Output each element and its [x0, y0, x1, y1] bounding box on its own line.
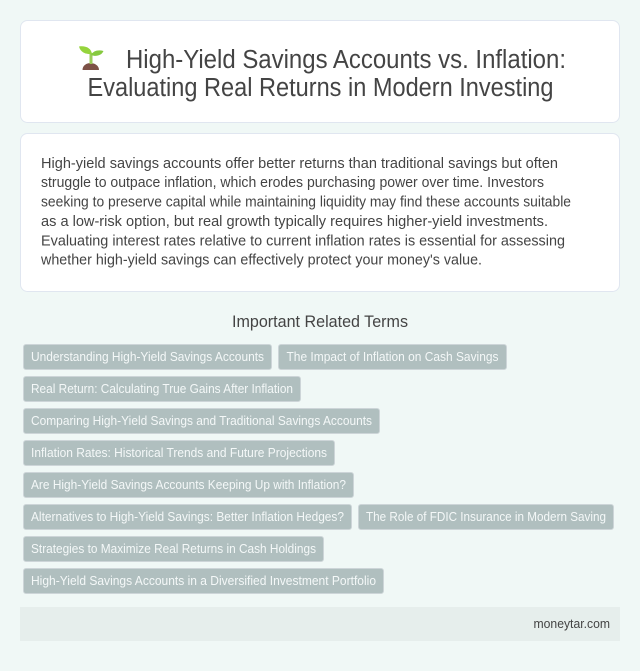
chip: High-Yield Savings Accounts in a Diversified Investment Portfolio [31, 574, 376, 588]
chip [24, 376, 300, 402]
chip: Alternatives to High-Yield Savings: Better Inflation Hedges? [31, 510, 344, 524]
chip [24, 472, 354, 498]
chip [24, 344, 272, 370]
chip [24, 568, 384, 594]
text block: summary paragraph: High-yield savings accounts offer better returns than traditional savings but often [41, 156, 558, 172]
chip: The Role of FDIC Insurance in Modern Saving [366, 510, 606, 524]
chip [24, 504, 352, 530]
chip [24, 440, 334, 466]
chip: The Impact of Inflation on Cash Savings [286, 350, 498, 364]
chip: Inflation Rates: Historical Trends and Future Projections [31, 446, 327, 460]
chip: Strategies to Maximize Real Returns in Cash Holdings [31, 542, 316, 556]
chip [24, 536, 324, 562]
chip [358, 504, 614, 530]
chip [24, 408, 380, 434]
panel: title card [20, 20, 620, 122]
title: High-Yield Savings Accounts vs. Inflation: [126, 46, 566, 74]
chip: Understanding High-Yield Savings Accounts [31, 350, 264, 364]
heading: related terms: Important Related Terms [232, 313, 408, 331]
chip: Real Return: Calculating True Gains After Inflation [31, 382, 293, 396]
text block: summary paragraph: struggle to outpace inflation, which erodes purchasing power over time. Investors [41, 175, 544, 191]
panel: summary [20, 134, 620, 292]
footer: site name: moneytar.com [534, 616, 610, 631]
text block: summary paragraph: as a low-risk option, but real growth typically requires higher-yield investments. [41, 214, 548, 230]
chip [278, 344, 506, 370]
text block: summary paragraph [40, 156, 571, 268]
footer [20, 607, 620, 641]
title: Evaluating Real Returns in Modern Investing [88, 74, 554, 102]
title [88, 46, 566, 102]
text block: summary paragraph: Evaluating interest rates relative to current inflation rates is essential for assessing [41, 234, 565, 250]
text block: summary paragraph: seeking to preserve capital while maintaining liquidity may find these accounts suitable [41, 194, 571, 210]
text block: summary paragraph: whether high-yield savings can effectively protect your money's value. [40, 252, 482, 268]
panel: related term chips [24, 344, 614, 594]
chip: Comparing High-Yield Savings and Traditional Savings Accounts [31, 414, 372, 428]
icon: seedling [79, 46, 104, 70]
chip: Are High-Yield Savings Accounts Keeping Up with Inflation? [31, 478, 346, 492]
